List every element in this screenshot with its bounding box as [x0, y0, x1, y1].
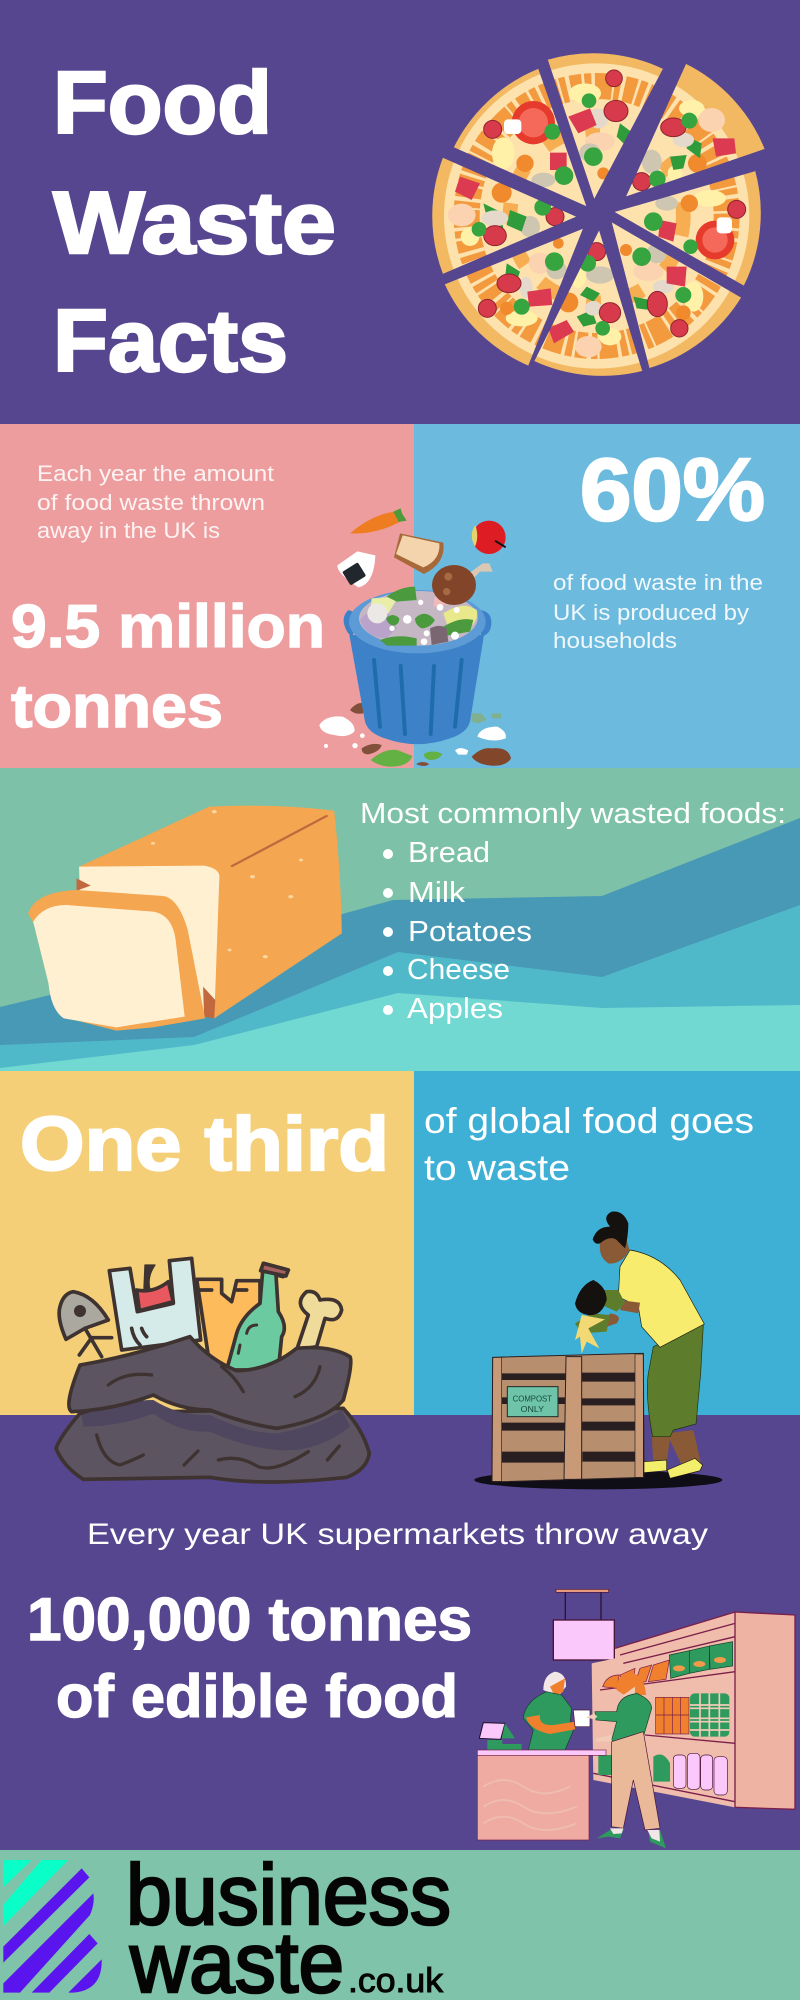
- hanging sign: [553, 1589, 614, 1660]
- panel: footer logo: [0, 1848, 800, 2000]
- panel: UK annual waste (pink): [0, 424, 414, 768]
- big stat: 9.5 million tonnes: tonnes: [11, 673, 223, 740]
- text block: every year: Every year UK supermarkets throw away: [87, 1518, 708, 1551]
- big stat: 100,000 tonnes: [27, 1586, 472, 1730]
- text block: each year: of food waste thrown: [37, 490, 265, 515]
- chart-like wave backdrop: [0, 818, 800, 1071]
- big stat: 100,000 tonnes: 100,000 tonnes: [27, 1586, 472, 1653]
- title: Food: [53, 53, 272, 152]
- till: [479, 1723, 522, 1750]
- list of foods: Cheese: [407, 954, 510, 986]
- icon: bread loaf: [28, 806, 342, 1031]
- list of foods: [383, 837, 532, 1025]
- panel: one third (yellow): [0, 1071, 414, 1415]
- icon: rubbish bag: [56, 1258, 369, 1482]
- panel: header: [51, 53, 765, 376]
- panel: most commonly wasted foods: [0, 768, 800, 1071]
- list of foods: Milk: [408, 877, 466, 909]
- text block: global food: to waste: [424, 1147, 570, 1188]
- sign: compost only: [507, 1387, 558, 1417]
- sign: compost only: ONLY: [521, 1404, 544, 1414]
- text block: each year: Each year the amount: [37, 461, 274, 486]
- counter: [477, 1750, 606, 1840]
- text block: global food: [424, 1100, 754, 1188]
- logo wordmark: [126, 1848, 451, 2000]
- list of foods: Potatoes: [408, 916, 532, 948]
- text block: households: UK is produced by: [553, 600, 749, 625]
- title: Waste: [53, 173, 336, 272]
- panel: global waste (blue): [414, 1071, 800, 1415]
- person: cashier: [523, 1672, 590, 1750]
- sign: compost only: COMPOST: [513, 1393, 553, 1403]
- text block: each year: away in the UK is: [37, 518, 220, 543]
- text block: each year: [37, 461, 274, 543]
- person: customer: [586, 1672, 666, 1848]
- list of foods: Bread: [408, 837, 490, 869]
- title: [53, 53, 336, 390]
- big stat: 100,000 tonnes: of edible food: [56, 1663, 458, 1730]
- icon: person composting: [474, 1211, 722, 1489]
- logo wordmark: .co.uk: [348, 1962, 444, 2000]
- text block: households: of food waste in the: [553, 570, 763, 595]
- big stat: 60%: 60%: [580, 440, 765, 539]
- icon: rubbish bin with food: [319, 508, 511, 767]
- icon: pizza: [420, 50, 773, 383]
- crate: [492, 1353, 644, 1482]
- panel: supermarkets (purple): [0, 1415, 800, 1850]
- shelf unit: [592, 1612, 795, 1809]
- list of foods: Apples: [407, 993, 503, 1025]
- big stat: 9.5 million tonnes: [11, 593, 325, 740]
- icon: business waste mark: [3, 1860, 102, 1993]
- panel: households (blue): [414, 424, 800, 768]
- text block: global food: of global food goes: [424, 1100, 754, 1141]
- big stat: 9.5 million tonnes: 9.5 million: [11, 593, 325, 660]
- title: Facts: [53, 291, 288, 390]
- heading: most wasted: Most commonly wasted foods:: [360, 798, 786, 830]
- text block: households: [553, 570, 763, 653]
- big stat: one third: One third: [20, 1102, 389, 1187]
- icon: shop checkout scene: [477, 1589, 795, 1848]
- text block: households: households: [553, 628, 677, 653]
- logo wordmark: business: [126, 1848, 451, 1943]
